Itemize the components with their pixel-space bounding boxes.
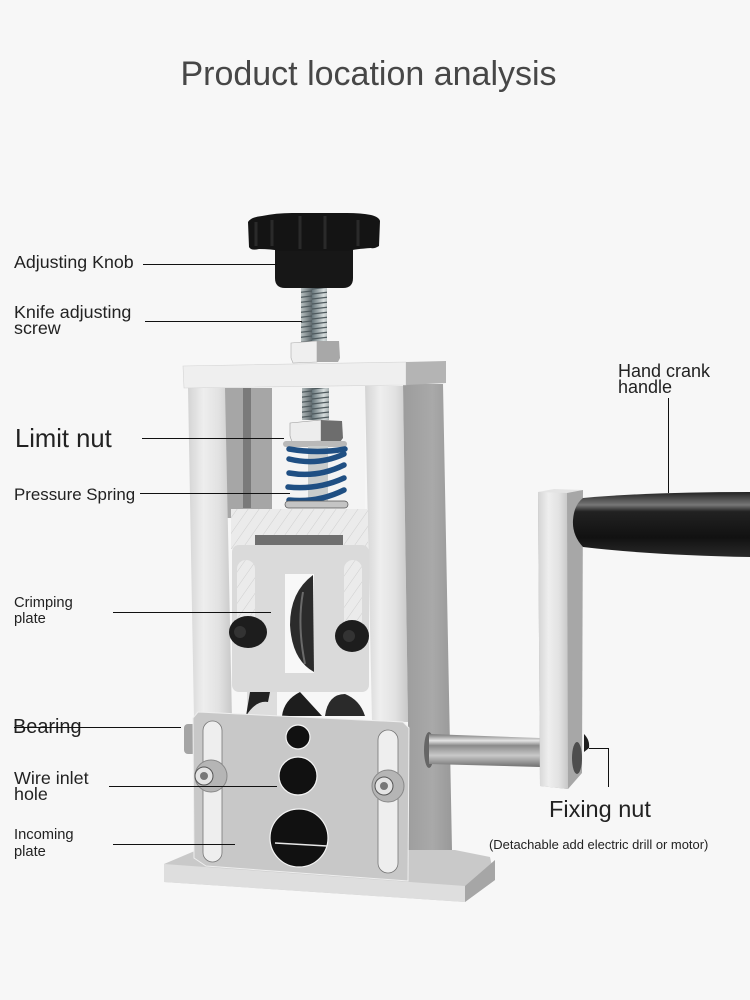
label: fixing nut: Fixing nut [549, 796, 651, 822]
plate window and blade [285, 574, 314, 673]
frame rear channel [225, 388, 272, 518]
label: crimping plate: plate [14, 611, 46, 627]
upper nut [291, 341, 340, 363]
label: bearing: Bearing [13, 716, 82, 738]
label: incoming plate: Incoming [14, 827, 74, 843]
hand crank grip [573, 492, 750, 557]
top plate [183, 361, 446, 388]
label: incoming plate: plate [14, 844, 46, 860]
wire holes [270, 725, 328, 867]
crimping plate [229, 545, 369, 692]
base plate [164, 850, 495, 902]
axle stub left [184, 724, 196, 754]
right post [365, 384, 452, 850]
label: knife adjusting screw: screw [14, 318, 61, 338]
incoming plate [193, 712, 409, 881]
label: fixing nut [549, 748, 651, 822]
label: pressure spring: Pressure Spring [14, 485, 135, 504]
label: crimping plate: Crimping [14, 595, 73, 611]
label: knife adjusting screw [14, 302, 302, 338]
label: wire inlet hole [14, 768, 277, 804]
lower screw [302, 388, 329, 420]
limit nut [283, 420, 347, 447]
left post [188, 388, 232, 720]
lower plate slots [203, 721, 398, 873]
label: wire inlet hole: hole [14, 784, 48, 804]
label: wire inlet hole: Wire inlet [14, 768, 89, 788]
label: hand crank handle [618, 361, 711, 493]
rod to crank [424, 732, 540, 768]
blade line [275, 843, 327, 846]
label: adjusting knob: Adjusting Knob [14, 252, 134, 272]
label: crimping plate [14, 595, 271, 627]
hex bolt left [195, 760, 227, 792]
socket screw left [229, 616, 267, 648]
hex bolt right [372, 770, 404, 802]
cutting wheels [246, 692, 365, 716]
knife adjusting screw [301, 288, 327, 342]
back panel behind spring [272, 386, 365, 516]
socket screw right [335, 620, 369, 652]
crank arm [538, 489, 589, 789]
wire stripper machine [164, 213, 750, 902]
label: limit nut: Limit nut [15, 425, 112, 453]
knob [248, 213, 380, 288]
title: Product location analysis [180, 55, 557, 93]
pressure spring [285, 446, 348, 508]
label: hand crank handle: handle [618, 377, 672, 397]
label: knife adjusting screw: Knife adjusting [14, 302, 131, 322]
note: detachable: (Detachable add electric drill or motor) [489, 837, 708, 852]
label: incoming plate [14, 827, 235, 860]
sliding block [231, 509, 368, 549]
label: hand crank handle: Hand crank [618, 361, 711, 381]
plate slots [237, 560, 362, 630]
